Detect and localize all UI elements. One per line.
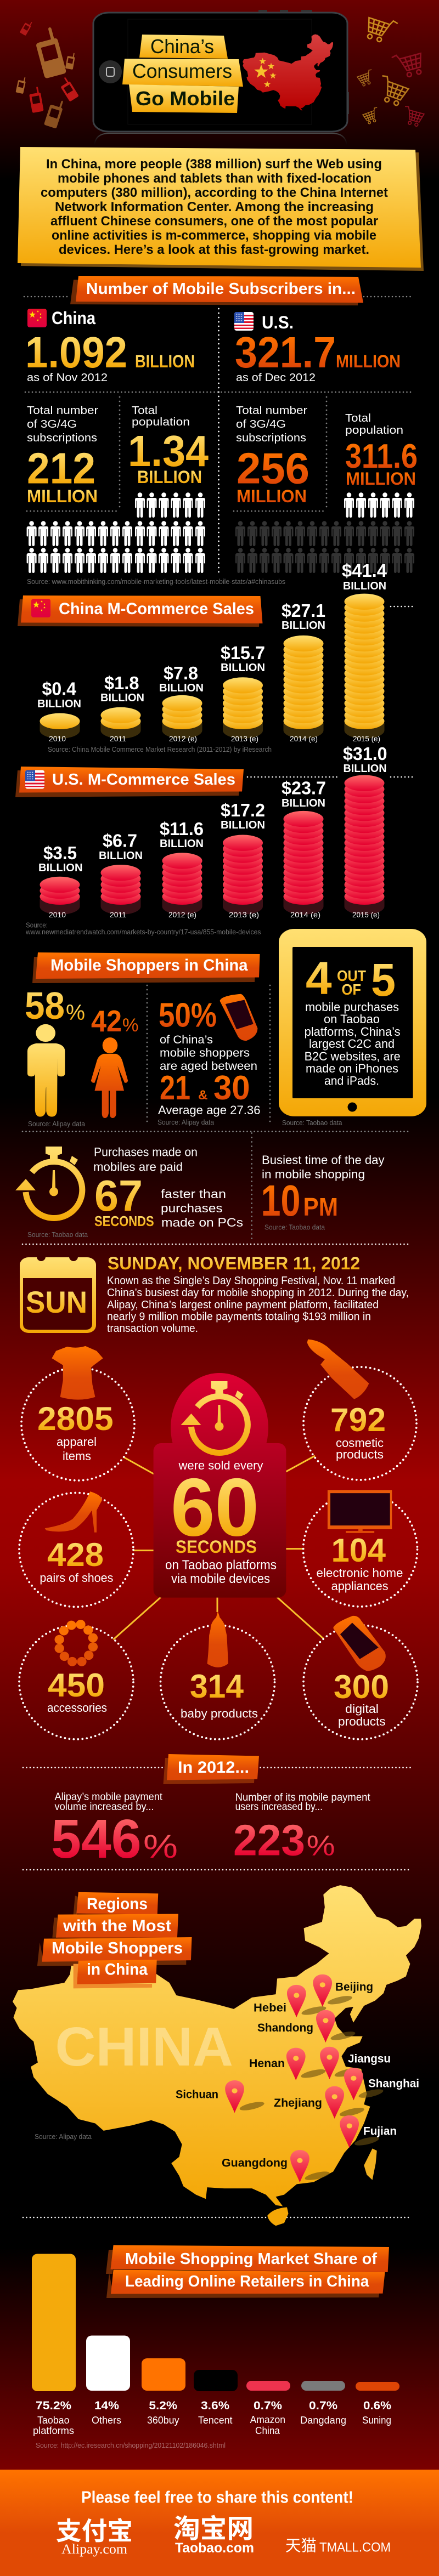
busiest time stat: in mobile shopping bbox=[262, 1167, 365, 1181]
item: apparel bbox=[21, 1346, 134, 1480]
payment speed stat: faster than bbox=[161, 1187, 226, 1201]
bar: tencent 3.6% bbox=[194, 2370, 238, 2391]
icon: bracelet bbox=[54, 1620, 98, 1666]
heading: in 2012 bbox=[164, 1754, 259, 1784]
china headline stat: BILLION bbox=[135, 351, 195, 371]
chart: us m-commerce sales bbox=[15, 744, 414, 936]
icon: china flag map bbox=[243, 35, 333, 110]
gender split: men 58% women 42%: Source: Alipay data bbox=[28, 1120, 85, 1128]
people icons: china bbox=[27, 492, 205, 573]
coin stacks bbox=[40, 594, 384, 729]
intro text panel: mobile phones and tablets than with fixed-location bbox=[58, 171, 372, 186]
logo: tmall: TMALL.COM bbox=[319, 2540, 391, 2555]
paragraph: singles day: Alipay, China’s largest online payment platform, facilitated bbox=[107, 1299, 379, 1311]
payment speed stat: Source: Taobao data bbox=[27, 1231, 88, 1239]
tablet: 4 out of 5: largest C2C and bbox=[309, 1037, 395, 1051]
bar: others 14% bbox=[86, 2336, 130, 2391]
item: baby products: baby products bbox=[181, 1706, 258, 1721]
icon: calendar: SUN bbox=[26, 1285, 87, 1319]
heading: in 2012: In 2012... bbox=[178, 1758, 249, 1777]
year labels: 2012 (e) bbox=[169, 734, 197, 743]
bar percentages bbox=[36, 2399, 391, 2412]
header: decorative mobile phones bbox=[15, 19, 79, 129]
source: china sales: Source: China Mobile Commerce Market Research (2011-2012) by iResearch bbox=[48, 746, 272, 753]
china 3g subscriptions: 212 bbox=[27, 444, 95, 492]
stat: alipay payment volume: Alipay’s mobile payment bbox=[55, 1791, 163, 1803]
us 3g subscriptions: Total number bbox=[236, 405, 307, 417]
bar percentages: 3.6% bbox=[201, 2399, 229, 2412]
us 3g subscriptions: 256 bbox=[237, 444, 309, 492]
logo: alipay: Alipay.com bbox=[61, 2542, 128, 2557]
tablet: 4 out of 5 bbox=[279, 929, 426, 1127]
china population: 1.34 bbox=[128, 427, 209, 475]
bar names: China bbox=[255, 2425, 280, 2436]
value labels: BILLION bbox=[282, 797, 325, 809]
bar names: Tencent bbox=[198, 2415, 233, 2426]
busiest time stat: PM bbox=[303, 1193, 338, 1221]
heading: market share: Mobile Shopping Market Share of bbox=[125, 2250, 377, 2268]
heading: regions bbox=[37, 1892, 192, 1988]
map: regions with the most mobile shoppers bbox=[13, 1885, 421, 2226]
title banner: Consumers bbox=[132, 60, 232, 82]
center panel: sold every 60 seconds: via mobile devices bbox=[171, 1571, 270, 1586]
gender split: men 58% women 42% bbox=[25, 984, 138, 1128]
us headline stat: 321.7 bbox=[235, 328, 336, 377]
year labels: 2012 (e) bbox=[168, 910, 196, 919]
logo: taobao: Taobao.com bbox=[175, 2540, 254, 2556]
payment speed stat: 67 bbox=[94, 1171, 143, 1220]
item: apparel: items bbox=[63, 1449, 91, 1463]
value labels: BILLION bbox=[37, 698, 81, 710]
us headline stat: as of Dec 2012 bbox=[236, 372, 316, 384]
tablet: 4 out of 5: 4 bbox=[306, 952, 332, 1004]
icon: t-shirt bbox=[52, 1346, 103, 1400]
year labels: 2010 bbox=[49, 910, 66, 919]
year labels: 2013 (e) bbox=[231, 734, 258, 743]
value labels: $23.7 bbox=[282, 778, 326, 798]
heading: regions: Mobile Shoppers bbox=[52, 1939, 183, 1957]
section: sunday november 11 bbox=[19, 1252, 418, 1739]
age stat: 30 bbox=[213, 1069, 250, 1107]
bar names: Taobao bbox=[37, 2415, 69, 2426]
value labels: BILLION bbox=[159, 682, 204, 694]
center panel: sold every 60 seconds: 60 bbox=[171, 1461, 259, 1553]
heading: mobile shoppers in china: Mobile Shoppers in China bbox=[50, 956, 248, 974]
paragraph: singles day: transaction volume. bbox=[107, 1323, 198, 1335]
stat: mobile payment users: users increased by... bbox=[235, 1801, 323, 1813]
value labels: BILLION bbox=[221, 662, 265, 674]
us headline stat: MILLION bbox=[336, 351, 401, 371]
heading: china m-commerce sales bbox=[18, 595, 262, 627]
bar names: Dangdang bbox=[300, 2415, 346, 2426]
heading: regions: in China bbox=[87, 1961, 148, 1978]
item: shoes: 428 bbox=[47, 1536, 104, 1573]
title banner: Go Mobile bbox=[136, 87, 235, 110]
paragraph: singles day bbox=[107, 1275, 409, 1335]
item: accessories: 450 bbox=[48, 1667, 105, 1704]
busiest time stat: 10 bbox=[261, 1176, 301, 1225]
item: cosmetics: 792 bbox=[330, 1402, 386, 1438]
bar: 360buy 5.2% bbox=[142, 2358, 185, 2391]
bar percentages: 5.2% bbox=[149, 2399, 177, 2412]
value labels: BILLION bbox=[160, 838, 204, 850]
bar names: 360buy bbox=[147, 2415, 179, 2426]
age stat: mobile shoppers bbox=[160, 1047, 250, 1059]
item: cosmetics: products bbox=[336, 1448, 384, 1461]
item: digital products: 300 bbox=[334, 1669, 389, 1705]
value labels: $31.0 bbox=[343, 744, 387, 764]
us 3g subscriptions: MILLION bbox=[237, 486, 307, 506]
region labels bbox=[176, 1981, 419, 2170]
value labels: BILLION bbox=[282, 620, 325, 632]
china 3g subscriptions: of 3G/4G bbox=[27, 418, 77, 430]
item: cosmetics bbox=[303, 1340, 417, 1480]
china population: population bbox=[132, 416, 190, 428]
map watermark: CHINA bbox=[55, 2016, 233, 2078]
item: baby products bbox=[160, 1611, 274, 1739]
china headline stat bbox=[25, 308, 195, 384]
us population: Total bbox=[345, 412, 371, 424]
region labels: Fujian bbox=[363, 2125, 397, 2137]
tablet: 4 out of 5: OF bbox=[341, 981, 361, 998]
china population bbox=[128, 405, 209, 487]
year labels bbox=[49, 910, 380, 919]
year labels: 2010 bbox=[49, 734, 66, 743]
payment speed stat: Purchases made on bbox=[94, 1145, 198, 1159]
chart: market share of online retailers bbox=[32, 2245, 399, 2449]
coin shadows bbox=[40, 899, 384, 915]
us 3g subscriptions: subscriptions bbox=[236, 432, 306, 444]
map pins bbox=[225, 1974, 385, 2182]
connector lines bbox=[114, 1456, 323, 1639]
paragraph: singles day: Known as the Single’s Day Shopping Festival, Nov. 11 marked bbox=[107, 1275, 395, 1287]
paragraph: singles day: China’s busiest day for mobile shopping in 2012. During the day, bbox=[107, 1287, 409, 1299]
heading: market share bbox=[106, 2245, 389, 2298]
value labels: BILLION bbox=[344, 763, 386, 775]
item: electronics: electronic home bbox=[316, 1566, 403, 1580]
value labels bbox=[37, 560, 387, 710]
payment speed stat: purchases bbox=[161, 1201, 223, 1215]
logo: taobao bbox=[173, 2515, 254, 2556]
china headline stat: as of Nov 2012 bbox=[27, 372, 108, 384]
bar percentages: 0.6% bbox=[363, 2399, 391, 2412]
item: electronics: 104 bbox=[331, 1532, 386, 1569]
icon: smartphone bbox=[333, 1616, 386, 1671]
region labels: Guangdong bbox=[222, 2157, 288, 2170]
logo: tmall bbox=[285, 2537, 391, 2555]
tablet: 4 out of 5: Source: Taobao data bbox=[282, 1119, 342, 1127]
value labels bbox=[38, 744, 387, 874]
us population: population bbox=[345, 424, 403, 436]
value labels: BILLION bbox=[100, 692, 144, 704]
item: baby products: 314 bbox=[190, 1668, 244, 1705]
bar percentages: 0.7% bbox=[254, 2399, 282, 2412]
icon: baby bottle bbox=[207, 1611, 228, 1667]
bar names bbox=[33, 2414, 391, 2436]
value labels: BILLION bbox=[221, 819, 265, 831]
region labels: Shandong bbox=[257, 2022, 313, 2034]
year labels: 2011 bbox=[110, 910, 126, 919]
age stat: of China’s bbox=[160, 1034, 213, 1046]
china 3g subscriptions: subscriptions bbox=[27, 432, 97, 444]
smartphone with title bbox=[93, 10, 349, 147]
tablet: 4 out of 5: and iPads. bbox=[324, 1074, 379, 1088]
bar: taobao platforms 75.2% bbox=[32, 2254, 76, 2391]
age stat bbox=[157, 994, 260, 1126]
icon: calendar bbox=[20, 1252, 96, 1333]
heading: market share: Leading Online Retailers in China bbox=[125, 2273, 369, 2290]
icon: man bbox=[27, 1024, 65, 1117]
source: us sales: Source: bbox=[26, 921, 48, 929]
region labels: Jiangsu bbox=[348, 2053, 391, 2065]
gender split: men 58% women 42%: 58 bbox=[25, 984, 65, 1027]
value labels: $0.4 bbox=[42, 679, 77, 699]
item: cosmetics: cosmetic bbox=[336, 1436, 384, 1450]
year labels: 2014 (e) bbox=[290, 734, 318, 743]
stat: mobile payment users: 223 bbox=[233, 1816, 305, 1864]
bar names: Suning bbox=[362, 2415, 391, 2426]
gender split: men 58% women 42%: % bbox=[66, 1001, 85, 1025]
footer message: Please feel free to share this content! bbox=[81, 2488, 353, 2507]
bar: suning 0.6% bbox=[356, 2382, 399, 2391]
icon: television bbox=[328, 1490, 392, 1533]
item: shoes bbox=[19, 1491, 133, 1607]
tablet: 4 out of 5: mobile purchases bbox=[305, 1000, 399, 1014]
age stat: 21 bbox=[160, 1069, 190, 1107]
age stat: Source: Alipay data bbox=[157, 1119, 214, 1126]
title banner: China’s bbox=[150, 35, 214, 58]
paragraph: singles day: nearly 9 million mobile payments totaling $193 million in bbox=[107, 1310, 371, 1323]
gender split: men 58% women 42%: % bbox=[122, 1015, 138, 1036]
us headline stat bbox=[234, 312, 401, 384]
year labels: 2013 (e) bbox=[229, 910, 259, 919]
source: market share: Source: http://ec.iresearch.cn/shopping/20121102/186046.shtml bbox=[36, 2442, 226, 2449]
heading: number of mobile subscribers: Number of Mobile Subscribers in... bbox=[86, 280, 356, 298]
icon: smartphone bbox=[220, 994, 257, 1041]
heading: china m-commerce sales: China M-Commerce Sales bbox=[59, 600, 254, 618]
year labels: 2015 (e) bbox=[352, 910, 380, 919]
source: regions: Source: Alipay data bbox=[35, 2133, 92, 2141]
busiest time stat: Busiest time of the day bbox=[262, 1153, 384, 1167]
coin shadows bbox=[40, 723, 384, 739]
item: apparel: 2805 bbox=[37, 1400, 114, 1437]
china 3g subscriptions: MILLION bbox=[27, 486, 98, 506]
value labels: BILLION bbox=[343, 580, 386, 592]
age stat: & bbox=[198, 1088, 208, 1103]
stat: alipay payment volume: 546 bbox=[51, 1808, 142, 1870]
center panel: sold every 60 seconds: SECONDS bbox=[176, 1537, 257, 1557]
chart: china m-commerce sales bbox=[18, 560, 414, 753]
intro text panel: devices. Here’s a look at this fast-growing market. bbox=[59, 242, 369, 257]
stat: mobile payment users: % bbox=[307, 1830, 335, 1862]
us 3g subscriptions: of 3G/4G bbox=[236, 418, 286, 430]
heading: sunday november 11 2012: SUNDAY, NOVEMBER 11, 2012 bbox=[108, 1253, 360, 1273]
logo: tmall: 天猫 bbox=[285, 2537, 317, 2555]
bar percentages: 14% bbox=[94, 2399, 119, 2412]
payment speed stat: made on PCs bbox=[161, 1216, 243, 1229]
us 3g subscriptions bbox=[236, 405, 309, 506]
value labels: $1.8 bbox=[104, 673, 139, 693]
bar percentages: 75.2% bbox=[36, 2399, 71, 2412]
intro text panel: online activities is m-commerce, shopping via mobile bbox=[52, 228, 376, 243]
item: accessories: accessories bbox=[47, 1701, 107, 1715]
stat: alipay payment volume: volume increased by... bbox=[55, 1801, 154, 1813]
bar names: Others bbox=[92, 2415, 121, 2426]
intro text panel: affluent Chinese consumers, one of the most popular bbox=[50, 214, 378, 229]
item: electronics bbox=[303, 1490, 417, 1607]
value labels: $27.1 bbox=[282, 600, 325, 621]
region labels: Henan bbox=[249, 2057, 285, 2070]
value labels: $11.6 bbox=[160, 819, 204, 839]
bar names: Amazon bbox=[250, 2414, 285, 2425]
people icons: us bbox=[235, 492, 414, 573]
source: us sales: www.newmediatrendwatch.com/markets-by-country/17-usa/855-mobile-devices bbox=[25, 928, 261, 936]
heading: mobile shoppers in china bbox=[32, 952, 260, 983]
heading: us m-commerce sales: U.S. M-Commerce Sales bbox=[52, 771, 235, 788]
tablet: 4 out of 5: made on iPhones bbox=[306, 1062, 398, 1075]
stat: alipay payment volume bbox=[51, 1791, 178, 1870]
intro text panel bbox=[18, 147, 424, 271]
us population: MILLION bbox=[346, 469, 416, 489]
footer bbox=[0, 2470, 439, 2576]
heading: us m-commerce sales bbox=[15, 767, 244, 797]
payment speed stat: SECONDS bbox=[94, 1213, 154, 1229]
year labels: 2011 bbox=[110, 734, 126, 743]
region labels: Beijing bbox=[335, 1981, 373, 1994]
busiest time stat bbox=[261, 1153, 384, 1232]
region labels: Hebei bbox=[254, 2001, 286, 2015]
value labels: $6.7 bbox=[103, 831, 137, 851]
stat: alipay payment volume: % bbox=[143, 1828, 178, 1865]
us population bbox=[345, 412, 418, 489]
age stat: 50% bbox=[159, 997, 217, 1034]
value labels: $7.8 bbox=[164, 663, 198, 683]
item: electronics: appliances bbox=[331, 1579, 389, 1593]
section: number of mobile subscribers bbox=[24, 276, 418, 586]
item: apparel: apparel bbox=[57, 1435, 97, 1449]
china 3g subscriptions bbox=[27, 405, 98, 506]
tablet: 4 out of 5: platforms, China’s bbox=[305, 1025, 401, 1039]
china headline stat: 1.092 bbox=[25, 328, 127, 377]
value labels: $15.7 bbox=[221, 643, 265, 663]
tablet: 4 out of 5: on Taobao bbox=[324, 1012, 380, 1026]
icon: woman bbox=[91, 1037, 128, 1118]
intro text panel: computers (380 million), according to the China Internet bbox=[41, 185, 388, 200]
year labels: 2015 (e) bbox=[353, 734, 380, 743]
value labels: BILLION bbox=[38, 862, 82, 874]
center panel: sold every 60 seconds bbox=[154, 1373, 286, 1598]
gender split: men 58% women 42%: 42 bbox=[91, 1004, 122, 1038]
item: accessories bbox=[19, 1620, 133, 1739]
heading: regions: Regions bbox=[87, 1895, 148, 1913]
busiest time stat: Source: Taobao data bbox=[264, 1224, 325, 1232]
item: shoes: pairs of shoes bbox=[40, 1571, 113, 1585]
icon: stopwatch bbox=[181, 1381, 247, 1453]
china headline stat: China bbox=[52, 308, 95, 328]
source: subscribers: Source: www.mobithinking.com/mobile-marketing-tools/latest-mobile-stats/a#chinasubs bbox=[27, 578, 285, 586]
tablet: 4 out of 5: B2C websites, are bbox=[305, 1049, 401, 1063]
value labels: $3.5 bbox=[43, 843, 77, 863]
icon: lipstick bbox=[307, 1340, 369, 1399]
value labels: $41.4 bbox=[342, 560, 387, 581]
center panel: sold every 60 seconds: were sold every bbox=[178, 1459, 263, 1472]
china 3g subscriptions: Total number bbox=[27, 405, 98, 417]
section: in 2012 bbox=[23, 1754, 412, 1870]
source: us sales bbox=[25, 921, 261, 936]
region labels: Zhejiang bbox=[274, 2097, 322, 2109]
us headline stat: U.S. bbox=[262, 313, 294, 332]
icon: stopwatch bbox=[15, 1147, 82, 1218]
logo: alipay: 支付宝 bbox=[56, 2517, 133, 2545]
logo: taobao: 淘宝网 bbox=[173, 2515, 254, 2544]
china population: BILLION bbox=[137, 467, 202, 487]
stat: mobile payment users bbox=[233, 1792, 370, 1864]
age stat: are aged between bbox=[160, 1060, 257, 1073]
stat: mobile payment users: Number of its mobile payment bbox=[235, 1792, 370, 1803]
header: decorative shopping carts bbox=[356, 14, 426, 127]
heading: number of mobile subscribers bbox=[70, 276, 363, 305]
intro text panel: In China, more people (388 million) surf the Web using bbox=[46, 157, 382, 172]
item: digital products: products bbox=[338, 1715, 386, 1728]
item: digital products bbox=[303, 1616, 418, 1739]
center panel: sold every 60 seconds: on Taobao platforms bbox=[165, 1558, 277, 1573]
year labels: 2014 (e) bbox=[290, 910, 320, 919]
value labels: BILLION bbox=[99, 850, 143, 862]
region labels: Sichuan bbox=[176, 2088, 218, 2101]
china map shape bbox=[13, 1885, 421, 2226]
heading: regions: with the Most bbox=[63, 1917, 171, 1935]
icon: high heel bbox=[45, 1491, 102, 1533]
age stat: Average age 27.36 bbox=[158, 1103, 260, 1117]
tablet: 4 out of 5: 5 bbox=[371, 954, 396, 1006]
region labels: Shanghai bbox=[368, 2078, 419, 2090]
year labels bbox=[49, 734, 380, 743]
china population: Total bbox=[132, 405, 157, 417]
value labels: $17.2 bbox=[221, 800, 265, 820]
item: digital products: digital bbox=[345, 1702, 379, 1716]
intro text panel: Network Information Center. Among the increasing bbox=[55, 200, 374, 214]
payment speed stat: mobiles are paid bbox=[93, 1160, 183, 1173]
dotted divider above market share bbox=[23, 2217, 412, 2218]
tablet: 4 out of 5: OUT bbox=[337, 967, 366, 984]
bar: amazon china 0.7% bbox=[246, 2381, 290, 2391]
title banner bbox=[122, 35, 243, 113]
bar: dangdang 0.7% bbox=[301, 2381, 345, 2391]
bar percentages: 0.7% bbox=[309, 2399, 337, 2412]
us population: 311.6 bbox=[345, 438, 418, 475]
section: mobile shoppers in china bbox=[15, 929, 426, 1244]
payment speed stat bbox=[15, 1145, 243, 1239]
bar names: platforms bbox=[33, 2425, 74, 2436]
coin stacks bbox=[40, 775, 384, 905]
